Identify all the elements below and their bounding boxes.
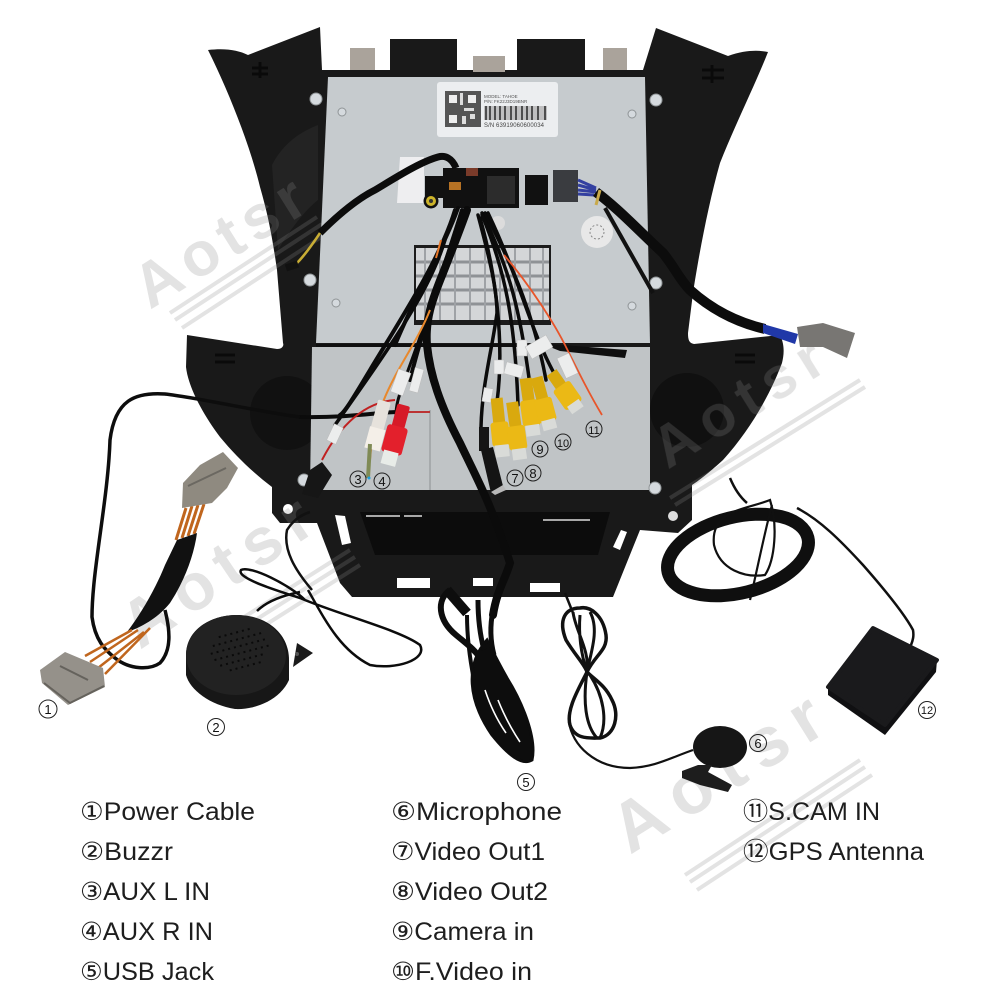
- photo number callouts: 2: [212, 720, 220, 735]
- connectors block: [424, 168, 613, 248]
- numbers on the plate: 10: [557, 438, 569, 450]
- watermark: Aotsr logos: Aotsr: [121, 163, 319, 322]
- legend column 2: ⑧Video Out2: [391, 878, 548, 906]
- USB cable bundle: [441, 590, 533, 762]
- label with QR code: S/N 63919060600034: [484, 123, 545, 129]
- buzzer speaker: [186, 569, 421, 709]
- legend column 1: ①Power Cable: [80, 798, 255, 826]
- legend column 2: ⑨Camera in: [391, 918, 534, 946]
- black lead bundle: [300, 208, 555, 615]
- legend column 2: [391, 798, 562, 986]
- aux orange tip: [368, 444, 370, 480]
- label with QR code: MODEL: TAHOE: [484, 94, 518, 99]
- right harness cable with grey connector: [596, 190, 855, 358]
- numbers on the plate: 7: [511, 471, 519, 486]
- jack plug: [479, 427, 506, 495]
- heat sink: [414, 245, 551, 325]
- metal plates: [298, 77, 662, 494]
- photo number callouts: 12: [921, 705, 933, 717]
- frame side wire: [286, 512, 312, 590]
- legend column 1: ⑤USB Jack: [80, 958, 215, 986]
- left plug on frame: [302, 462, 332, 498]
- legend column 2: ⑩F.Video in: [391, 958, 532, 986]
- black head unit frame: [186, 27, 784, 597]
- legend column 1: ④AUX R IN: [80, 918, 213, 946]
- RCA connector: AUX white: [364, 399, 393, 452]
- legend column 1: [80, 798, 255, 986]
- numbers on the plate: 4: [378, 474, 386, 489]
- cable labels: [327, 335, 578, 444]
- legend column 3: [743, 798, 924, 866]
- watermark: Aotsr logos: Aotsr: [106, 480, 326, 662]
- watermark: Aotsr logos: Aotsr: [597, 677, 837, 868]
- legend column 1: ③AUX L IN: [80, 878, 210, 906]
- power cable with connectors: [40, 394, 300, 705]
- label with QR code: [437, 82, 558, 137]
- numbers on the plate: [350, 421, 602, 489]
- GPS antenna and cable: [659, 478, 937, 735]
- legend column 2: ⑥Microphone: [391, 798, 562, 826]
- photo number callouts: 6: [754, 736, 762, 751]
- numbers on the plate: 8: [529, 466, 537, 481]
- left harness cable: [286, 156, 456, 268]
- legend column 3: ⑫GPS Antenna: [743, 838, 924, 866]
- photo number callouts: 1: [44, 702, 52, 717]
- label with QR code: P/N: FK22J3D19BNR: [484, 99, 528, 104]
- RCA connector: AUX red: [378, 402, 414, 468]
- legend column 3: ⑪S.CAM IN: [743, 798, 880, 826]
- numbers on the plate: 3: [354, 472, 362, 487]
- numbers on the plate: 11: [588, 425, 600, 437]
- numbers on the plate: 9: [536, 442, 544, 457]
- watermark: Aotsr logos: Aotsr: [640, 325, 836, 481]
- microphone with wire: [563, 593, 747, 792]
- legend column 1: ②Buzzr: [80, 838, 173, 866]
- legend column 2: ⑦Video Out1: [391, 838, 545, 866]
- photo number callouts: [39, 700, 936, 790]
- photo number callouts: 5: [522, 775, 530, 790]
- watermark: Aotsr logos: [106, 163, 872, 890]
- orange and red wires: [322, 240, 602, 460]
- RCA yellow connectors: [488, 367, 586, 461]
